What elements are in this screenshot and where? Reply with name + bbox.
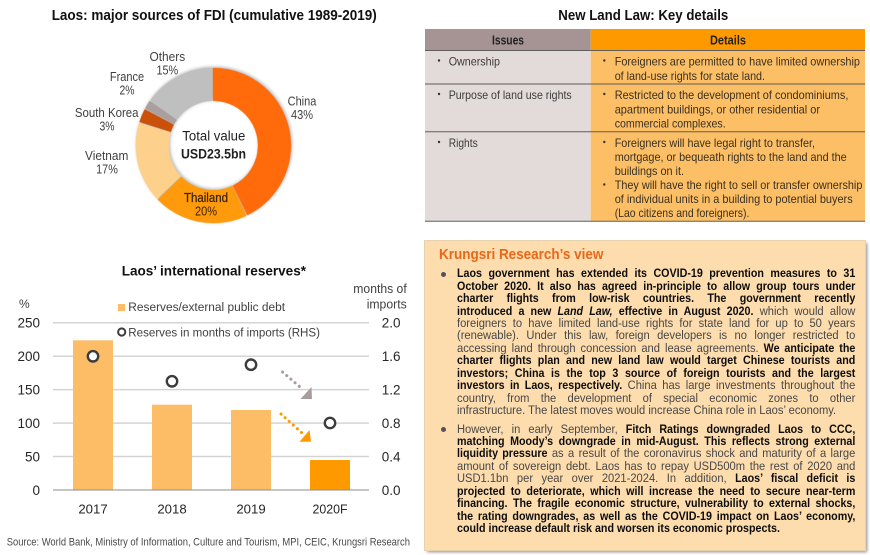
title: FDI donut: Laos: major sources of FDI (cumulative 1989-2019) xyxy=(52,7,377,24)
paragraph 1: introduced a new Land Law, effective in August 2020. which would allow xyxy=(456,304,855,318)
paragraph 2 xyxy=(456,422,855,535)
details column xyxy=(615,54,863,220)
right axis labels: 2.0 xyxy=(382,316,400,331)
donut labels: Vietnam xyxy=(85,149,128,163)
bullet 2 marker xyxy=(440,426,446,432)
right axis labels: 0.8 xyxy=(382,416,400,431)
donut labels: 43% xyxy=(291,108,313,122)
left axis labels: 50 xyxy=(25,450,40,464)
paragraph 2: matching Moody’s downgrade in mid-August. This reflects strong external xyxy=(456,434,855,448)
paragraph 1: investors; China is the top 3 source of foreign tourists and the largest xyxy=(456,366,855,380)
details column: buildings on it. xyxy=(615,164,684,178)
legend: bars: Reserves/external public debt xyxy=(128,300,286,314)
right axis labels: 1.6 xyxy=(382,349,400,364)
paragraph 2: financing. The fragile economic structure, vulnerability to external shocks, xyxy=(456,496,855,510)
arrow: orange trend xyxy=(281,414,311,442)
paragraph 1 xyxy=(456,266,856,417)
category labels xyxy=(78,502,348,516)
table: land law details xyxy=(425,29,865,221)
axis unit: months of imports: months of xyxy=(353,282,407,296)
donut labels: Thailand xyxy=(184,191,228,205)
category labels: 2018 xyxy=(157,502,187,516)
paragraph 2: the rating downgrades, as well as the COVID-19 impact on Laos’ economy, xyxy=(456,509,855,523)
title: reserves chart: Laos’ international reserves* xyxy=(122,262,307,278)
paragraph 1: Laos government has extended its COVID-19 prevention measures to 31 xyxy=(456,266,855,280)
paragraph 1: charter flights from low-risk countries. The government recently xyxy=(456,291,855,305)
axis unit: months of imports xyxy=(353,282,407,312)
donut labels: 15% xyxy=(156,64,178,78)
issues column: Rights xyxy=(449,136,478,150)
details column: apartment buildings, or other residential or xyxy=(615,102,820,116)
donut labels: France xyxy=(110,70,144,84)
table header: Details xyxy=(710,34,746,48)
table bullets xyxy=(438,59,606,186)
donut chart: FDI sources xyxy=(75,50,316,218)
details column: Restricted to the development of condominiums, xyxy=(615,88,848,102)
donut labels: 3% xyxy=(100,120,114,134)
legend: markers: Reserves in months of imports (RHS) xyxy=(128,325,320,339)
left axis labels: 150 xyxy=(17,383,40,398)
issues column: Ownership xyxy=(449,54,500,68)
donut labels xyxy=(75,50,316,218)
panel heading: Krungsri Research’s view xyxy=(439,246,604,262)
paragraph 2: amount of sovereign debt. Laos has to repay USD500m the rest of 2020 and xyxy=(456,459,855,473)
category labels: 2019 xyxy=(236,502,266,516)
left axis labels: 250 xyxy=(17,316,40,331)
paragraph 2: projected to deteriorate, which will increase the need to secure near-term xyxy=(456,484,855,498)
details column: commercial complexes. xyxy=(615,116,726,130)
details column: Foreigners will have legal right to transfer, xyxy=(615,136,815,150)
issues column: Purpose of land use rights xyxy=(449,88,572,102)
details column: mortgage, or bequeath rights to the land and the xyxy=(615,150,847,164)
paragraph 2: USD1.1bn per year over 2021-2024. In addition, Laos’ fiscal deficit is xyxy=(456,471,855,485)
source note: Source: World Bank, Ministry of Information, Culture and Tourism, MPI, CEIC, Krungsri Research xyxy=(7,536,410,548)
issues column xyxy=(449,54,572,150)
details column: (Lao citizens and foreigners). xyxy=(615,206,749,220)
paragraph 1: country, from the development of special economic zones to other xyxy=(456,391,855,405)
details column: of land-use rights for state land. xyxy=(615,69,765,83)
donut centre: total value: Total value xyxy=(182,128,245,144)
table backgrounds xyxy=(425,29,865,221)
arrow: grey trend xyxy=(282,372,312,399)
bar and marker chart: reserves xyxy=(17,282,407,516)
right axis labels xyxy=(382,316,401,498)
donut labels: 2% xyxy=(120,84,134,98)
markers: months of imports xyxy=(88,351,335,428)
donut labels: 17% xyxy=(96,162,118,176)
donut labels: South Korea xyxy=(75,106,139,120)
bars xyxy=(73,340,350,490)
bullet 1 marker xyxy=(440,272,446,276)
table header: Issues xyxy=(492,34,524,48)
paragraph 2: However, in early September, Fitch Ratings downgraded Laos to CCC, xyxy=(456,422,855,436)
right axis labels: 0.4 xyxy=(382,450,401,464)
details column: of individual units in a building to potential buyers xyxy=(615,192,853,206)
donut centre: total value: USD23.5bn xyxy=(181,146,246,162)
category labels: 2017 xyxy=(78,502,108,516)
donut centre: total value xyxy=(181,128,246,162)
paragraph 1: infrastructure. The latest moves would increase China role in Laos’ economy. xyxy=(456,403,836,417)
right axis labels: 1.2 xyxy=(382,383,400,398)
paragraph 1: foreigners to have limited land-use rights for state land for up to 50 years xyxy=(456,316,855,330)
paragraph 1: accessing land through concession and lease agreements. We anticipate the xyxy=(456,341,855,355)
right axis labels: 0.0 xyxy=(382,483,400,498)
axis unit: months of imports: imports xyxy=(367,298,407,312)
category labels: 2020F xyxy=(312,502,348,516)
paragraph 1: investors in Laos, respectively. China has large investments throughout the xyxy=(456,378,855,392)
panel: Krungsri Research's view xyxy=(425,241,865,550)
donut labels: 20% xyxy=(195,204,217,218)
left axis labels: 100 xyxy=(17,416,40,431)
paragraph 2: liquidity pressure as a result of the coronavirus shock and maturity of a large xyxy=(456,446,855,460)
left axis labels: 0 xyxy=(32,483,40,498)
paragraph 2: could increase default risk and worsen its economic prospects. xyxy=(456,521,779,535)
table header xyxy=(492,34,746,48)
title: land law table: New Land Law: Key details xyxy=(558,8,728,24)
axis unit: percent: % xyxy=(19,297,30,311)
left axis labels xyxy=(17,316,40,498)
left axis labels: 200 xyxy=(17,349,40,364)
paragraph 1: charter flights plan and new land law would target Chinese tourists and xyxy=(456,353,855,367)
donut labels: Others xyxy=(149,50,185,64)
donut labels: China xyxy=(288,94,316,108)
paragraph 1: (renewable). Under this law, foreign developers is no longer restricted to xyxy=(456,328,855,342)
paragraph 1: October 2020. It also has agreed in-principle to allow group tours under xyxy=(456,279,855,293)
